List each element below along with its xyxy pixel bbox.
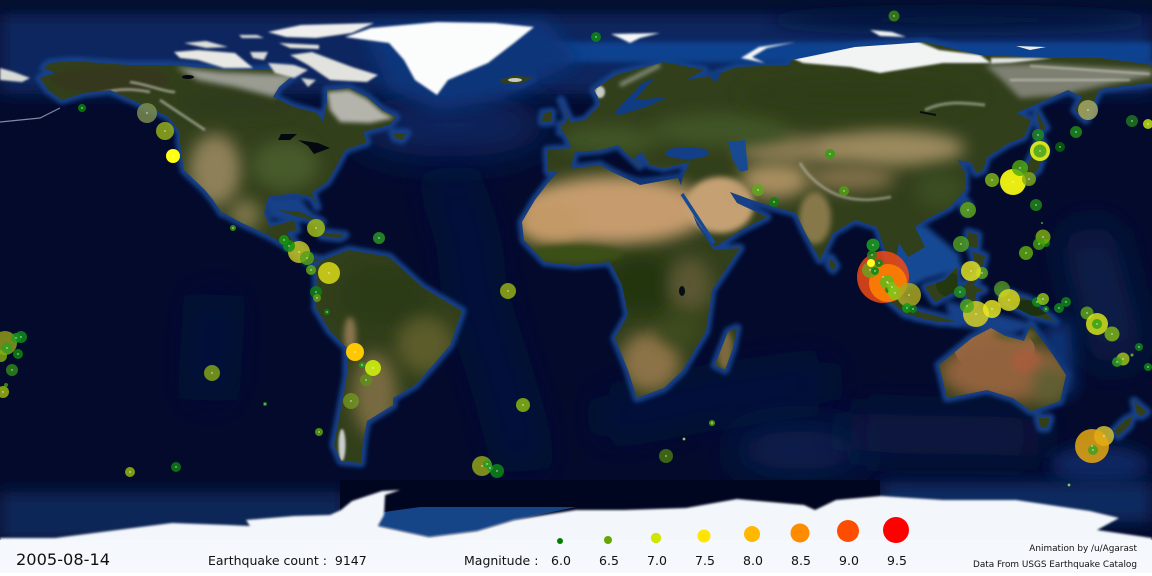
earthquakes: Pacific and South Atlantic — [0, 283, 1070, 486]
earthquakes: New Zealand region — [1075, 426, 1114, 463]
legend item 7.0: 7.0 — [647, 553, 667, 568]
landmasses with terrain colouring — [40, 42, 1152, 463]
legend item 9.0: 9.0 — [839, 553, 859, 568]
magnitude legend — [464, 517, 909, 568]
legend item 8.0 — [743, 526, 763, 568]
Antarctica ice sheet — [0, 490, 1152, 576]
legend item 6.0: 6.0 — [551, 553, 571, 568]
legend item 8.5 — [790, 524, 811, 568]
legend item 9.0 — [837, 520, 859, 568]
earthquakes: Americas — [78, 103, 385, 409]
earthquakes: Sumatra great quake cluster — [857, 238, 921, 313]
attribution credit: Animation by /u/Agarast — [1029, 544, 1138, 554]
legend title: Magnitude : — [464, 553, 538, 568]
legend item 7.0 — [647, 533, 667, 568]
legend item 9.5 — [883, 517, 909, 568]
legend item 7.5: 7.5 — [695, 553, 715, 568]
data source credit: Data From USGS Earthquake Catalog — [973, 560, 1137, 570]
earthquakes: Eurasia and Japan — [591, 10, 1152, 207]
date label: 2005-08-14 — [16, 550, 110, 569]
continental shelves — [40, 20, 1152, 463]
legend item 7.5 — [695, 530, 715, 568]
legend item 9.5: 9.5 — [887, 553, 907, 568]
legend item 8.0: 8.0 — [743, 553, 763, 568]
legend item 6.5: 6.5 — [599, 553, 619, 568]
legend item 6.5 — [599, 536, 619, 568]
earthquakes: Western Pacific and Indonesia — [953, 199, 1152, 371]
legend item 6.0 — [551, 538, 571, 568]
earthquake count: Earthquake count : 9147 — [208, 553, 367, 568]
legend item 8.5: 8.5 — [791, 553, 811, 568]
Greenland and Arctic ice — [0, 22, 1046, 122]
inland seas and lakes — [182, 72, 936, 296]
